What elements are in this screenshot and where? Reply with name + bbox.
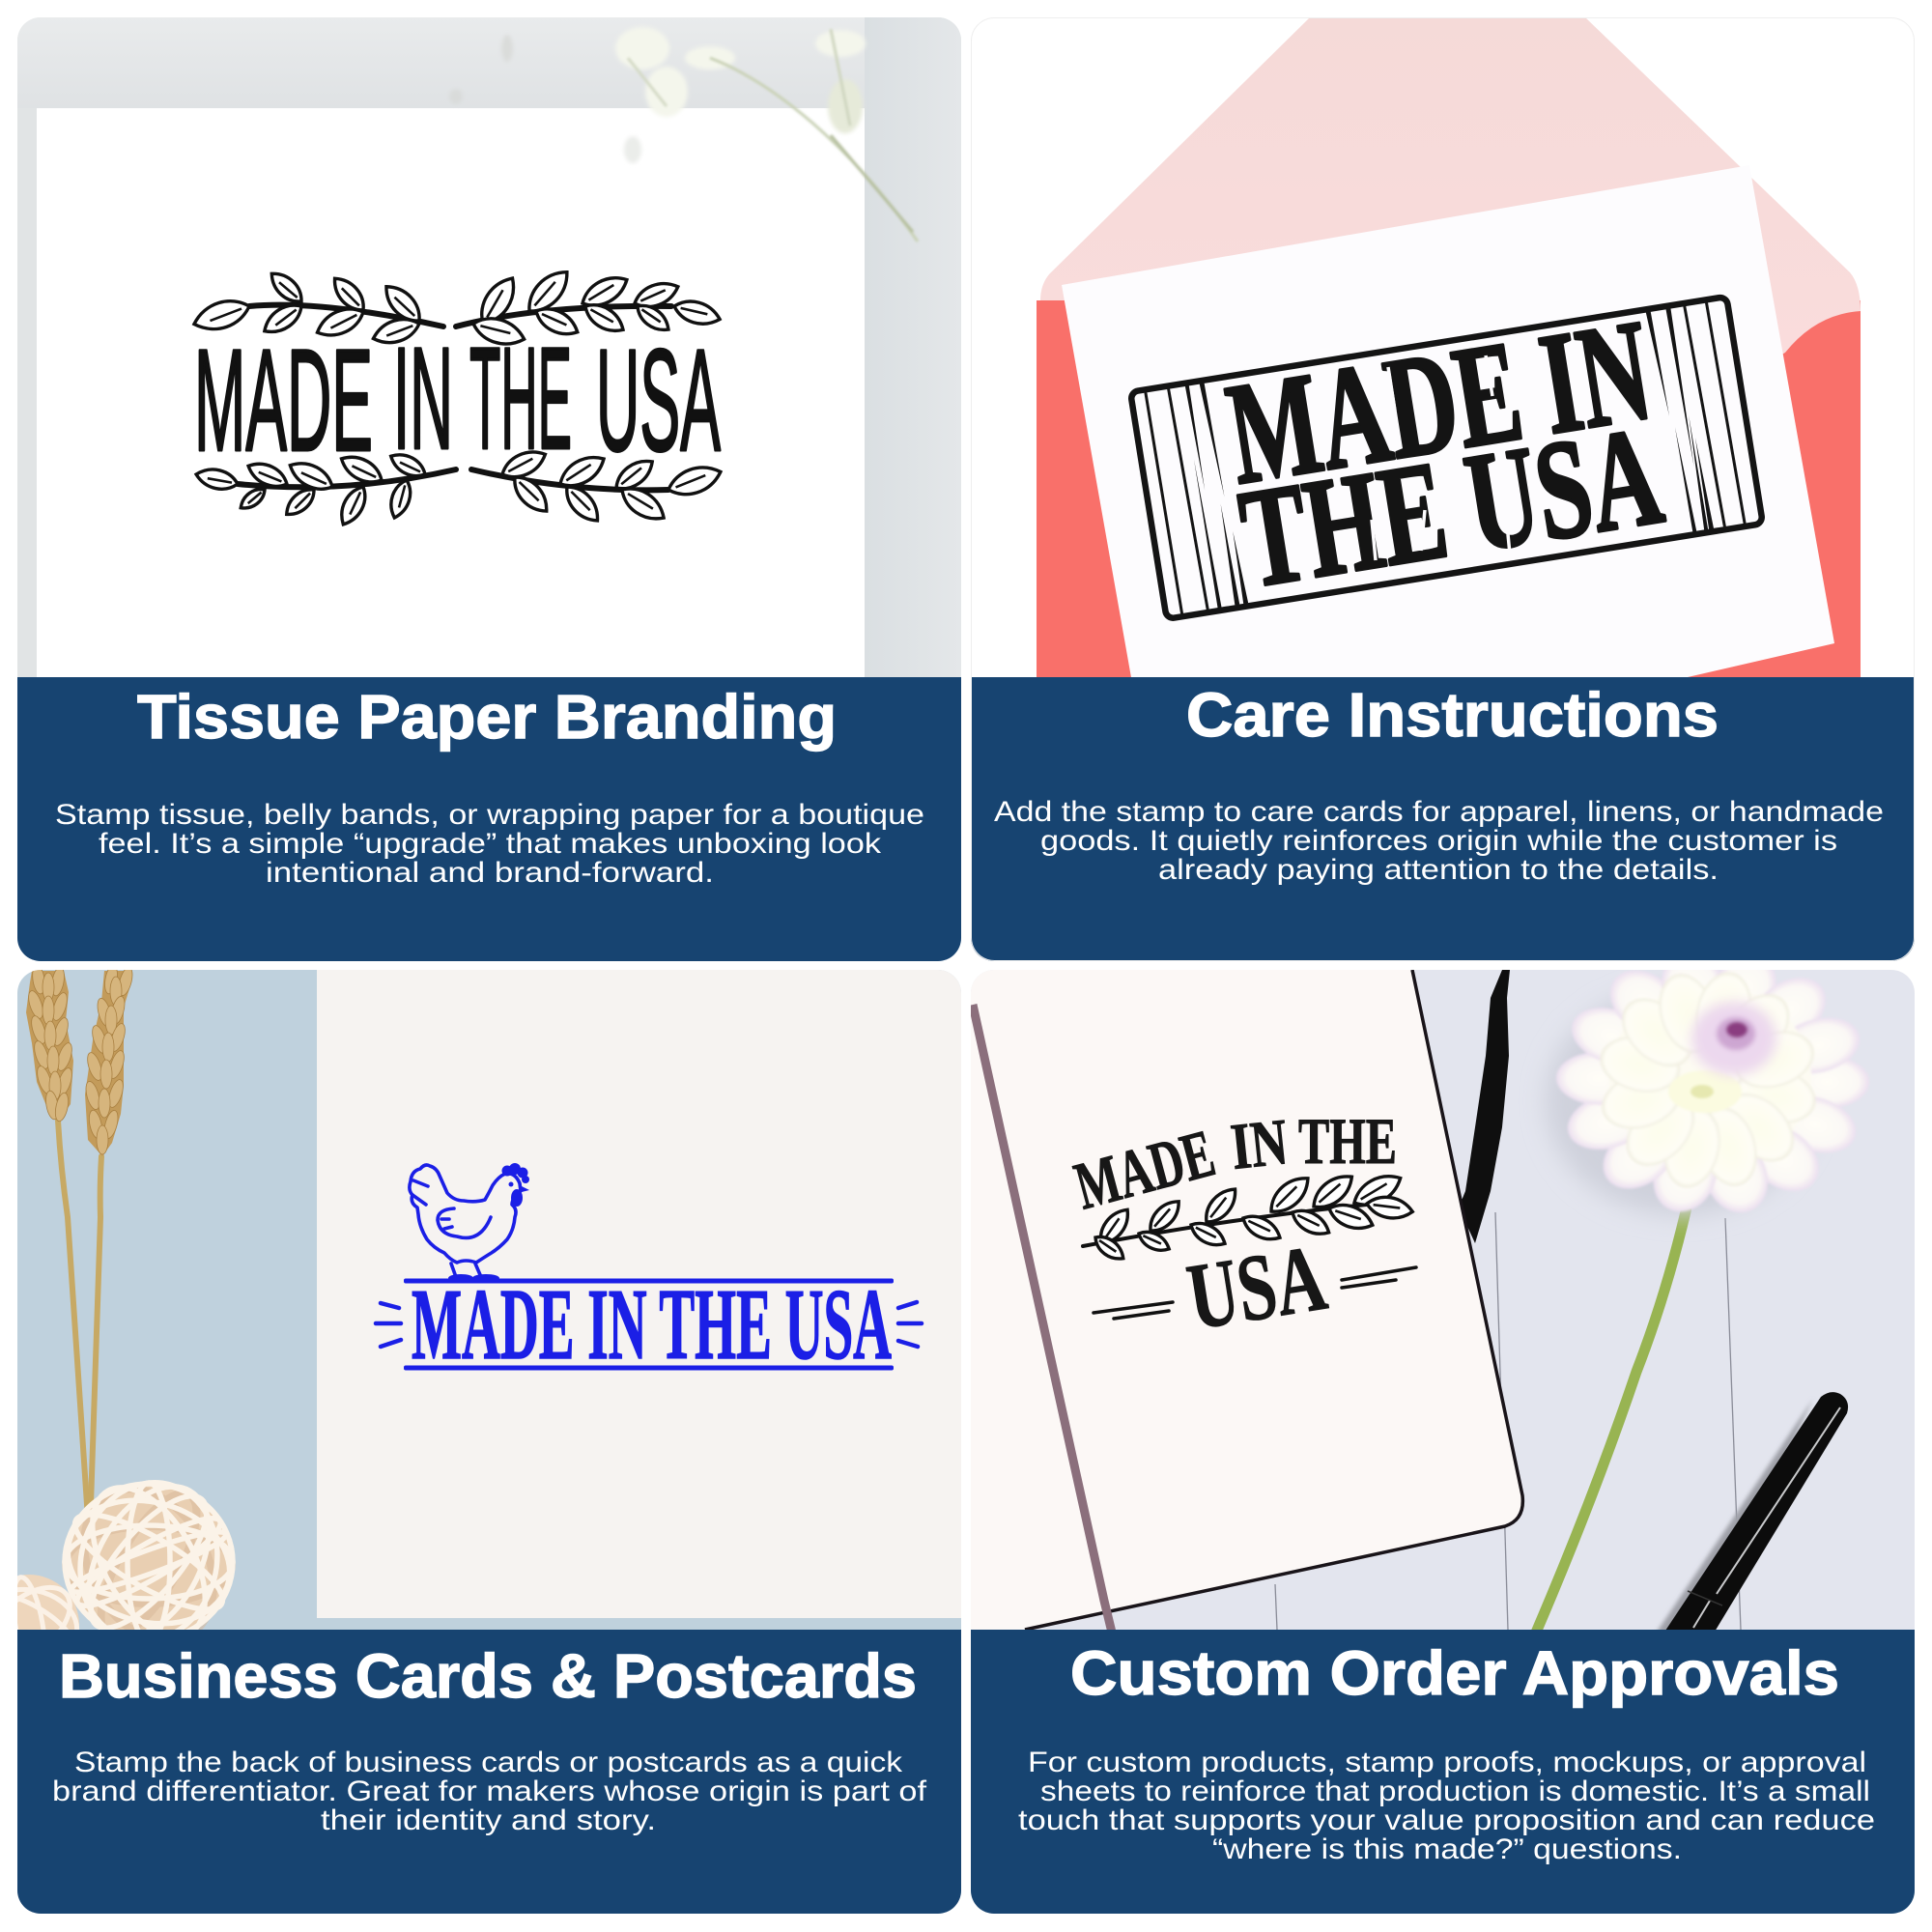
stamp: stencil made in the USA xyxy=(1127,275,1765,632)
text: custom order description: “where is this made?” questions. xyxy=(1212,1833,1682,1865)
heading: business cards and postcards: Business Cards & Postcards xyxy=(59,1641,917,1711)
photo: stamped white paper with foliage: USA xyxy=(596,319,721,481)
notebook page xyxy=(971,970,1522,1636)
heading: tissue paper branding: Tissue Paper Branding xyxy=(137,682,837,752)
photo: card in coral envelope xyxy=(971,17,1915,961)
panel: business cards and postcards xyxy=(0,964,961,1914)
text: custom order description xyxy=(1018,1747,1875,1865)
heading: care instructions: Care Instructions xyxy=(1186,680,1719,750)
text: care instructions description: already paying attention to the details. xyxy=(1158,854,1719,886)
black pen xyxy=(1654,1392,1848,1636)
photo: notebook, dahlia and pen xyxy=(971,947,1915,1914)
flower stem xyxy=(1536,1208,1687,1633)
black elastic xyxy=(1459,970,1510,1243)
flower shadow xyxy=(1544,1003,1773,1232)
stamp: hen and made in the USA: MADE IN THE USA xyxy=(412,1267,892,1380)
stamp: stencil made in the USA: MADE IN xyxy=(1217,290,1661,515)
text: care instructions description: goods. It quietly reinforces origin while the customer is xyxy=(1040,825,1837,857)
stamp: sprig made in the USA: USA xyxy=(1181,1226,1333,1350)
stamp: hen and made in the USA xyxy=(376,1163,922,1380)
text: business cards description: their identity and story. xyxy=(321,1804,656,1836)
heading: custom order approvals: Custom Order Approvals xyxy=(1070,1638,1839,1708)
stamp: leaf wreath made in the USA: IN xyxy=(393,317,453,479)
twine balls xyxy=(17,1480,236,1630)
text: tissue paper description xyxy=(55,799,924,889)
card outline xyxy=(972,17,1915,960)
stamp: stencil made in the USA: THE USA xyxy=(1231,396,1671,617)
stamp: sprig made in the USA xyxy=(1072,1120,1418,1327)
wheat stalks xyxy=(26,964,135,1533)
text: custom order description: sheets to reinforce that production is domestic. It’s a small xyxy=(1040,1776,1870,1807)
text: custom order description: touch that supports your value proposition and can reduce xyxy=(1018,1804,1875,1836)
panel: custom order approvals xyxy=(971,947,1915,1914)
stamp: leaf wreath made in the USA xyxy=(190,264,724,528)
panel: tissue paper branding xyxy=(17,17,961,961)
text: tissue paper description: feel. It’s a simple “upgrade” that makes unboxing look xyxy=(99,828,882,860)
text: care instructions description: Add the stamp to care cards for apparel, linens, or handmade xyxy=(994,796,1884,828)
text: tissue paper description: Stamp tissue, belly bands, or wrapping paper for a boutique xyxy=(55,799,924,831)
stamp: sprig made in the USA: THE xyxy=(1298,1104,1397,1178)
stamp: leaf wreath made in the USA: MADE xyxy=(194,319,373,481)
stamp: leaf wreath made in the USA: THE xyxy=(469,317,572,479)
stamp: sprig made in the USA: IN xyxy=(1228,1104,1291,1183)
photo: paper with wheat and twine balls xyxy=(0,964,961,1914)
text: business cards description: brand differentiator. Great for makers whose origin is part of xyxy=(52,1776,927,1807)
text: tissue paper description: intentional and brand-forward. xyxy=(266,857,714,889)
text: business cards description: Stamp the back of business cards or postcards as a quick xyxy=(74,1747,903,1778)
panel: care instructions xyxy=(971,17,1915,961)
stamp: sprig made in the USA: MADE xyxy=(1067,1117,1222,1224)
photo: stamped white paper with foliage xyxy=(17,17,961,961)
white card with stamp xyxy=(1062,165,1834,683)
text: custom order description: For custom products, stamp proofs, mockups, or approval xyxy=(1028,1747,1866,1778)
text: business cards description xyxy=(52,1747,927,1836)
stencil bridges xyxy=(1370,355,1511,560)
ribbon bookmark xyxy=(973,1005,1113,1636)
dahlia flower xyxy=(1555,970,1868,1213)
text: care instructions description xyxy=(994,796,1884,886)
